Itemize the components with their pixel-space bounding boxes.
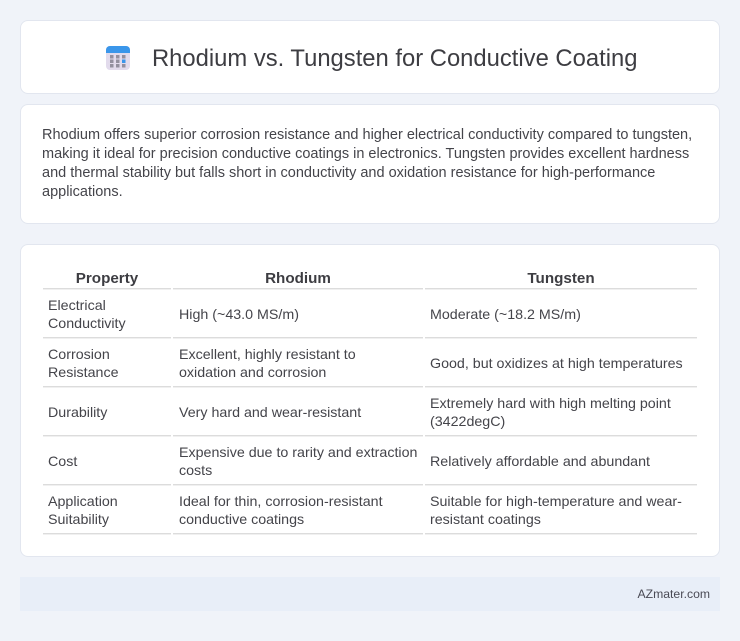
row: Corrosion Resistance (48, 347, 118, 381)
row: Application Suitability: Suitability (48, 512, 109, 528)
column heading: Property: Property (76, 270, 138, 287)
comparison table: Ideal for thin, corrosion-resistant (179, 494, 383, 510)
comparison table: oxidation and corrosion (179, 365, 326, 381)
comparison table: resistant coatings (430, 512, 541, 528)
column heading: Rhodium: Rhodium (265, 270, 331, 287)
comparison table: Relatively affordable and abundant (430, 454, 650, 470)
row: Application Suitability: Application (48, 494, 118, 510)
intro text: applications. (42, 184, 123, 200)
row: Electrical Conductivity: Conductivity (48, 316, 126, 332)
row: Corrosion Resistance: Resistance (48, 365, 118, 381)
row: Durability: Durability (48, 405, 107, 421)
icon: calendar (106, 46, 130, 70)
column heading: Tungsten: Tungsten (527, 270, 595, 287)
comparison table: costs (179, 463, 212, 479)
row: Corrosion Resistance: Corrosion (48, 347, 110, 363)
comparison table: Moderate (~18.2 MS/m) (430, 307, 581, 323)
title: Rhodium vs. Tungsten for Conductive Coating (152, 45, 637, 72)
intro text: making it ideal for precision conductive coatings in electronics. Tungsten provides excellent hardness (42, 146, 689, 162)
comparison table: Suitable for high-temperature and wear- (430, 494, 682, 510)
table panel (20, 244, 720, 557)
row: Cost: Cost (48, 454, 77, 470)
comparison table: High (~43.0 MS/m) (179, 307, 299, 323)
row: Electrical Conductivity (48, 298, 126, 332)
footer bar (20, 577, 720, 611)
intro text (42, 127, 692, 200)
header panel (20, 20, 720, 94)
comparison table: Extremely hard with high melting point (430, 396, 671, 412)
comparison table: Very hard and wear-resistant (179, 405, 361, 421)
intro panel (20, 104, 720, 224)
comparison table: conductive coatings (179, 512, 304, 528)
comparison table: Expensive due to rarity and extraction (179, 445, 417, 461)
comparison table: Good, but oxidizes at high temperatures (430, 356, 683, 372)
row: Application Suitability (48, 494, 118, 528)
comparison table: Excellent, highly resistant to (179, 347, 356, 363)
intro text: Rhodium offers superior corrosion resistance and higher electrical conductivity compared to tungsten, (42, 127, 692, 143)
intro text: and thermal stability but falls short in conductivity and oxidation resistance for high-performance (42, 165, 655, 181)
row: Electrical Conductivity: Electrical (48, 298, 106, 314)
comparison table: (3422degC) (430, 414, 505, 430)
footer credit: AZmater.com (638, 587, 710, 601)
